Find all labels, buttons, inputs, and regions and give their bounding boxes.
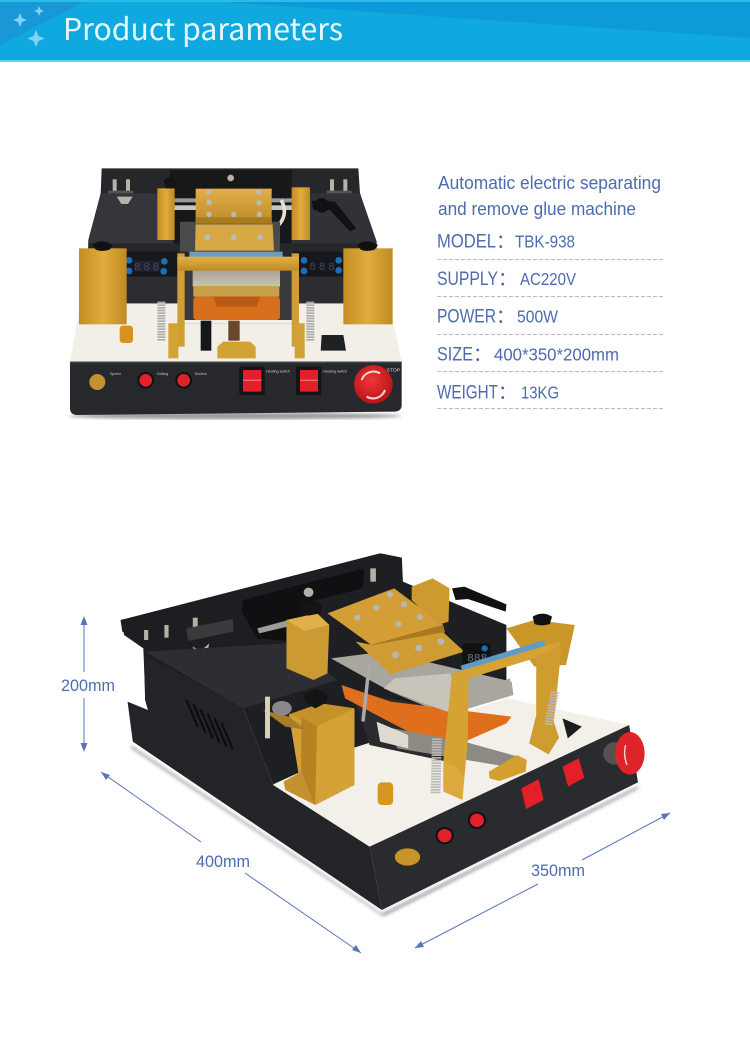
base knob bbox=[378, 782, 393, 805]
spec: model: ： bbox=[496, 226, 515, 254]
spec: power: POWER bbox=[437, 306, 496, 328]
knob and small black pad bbox=[120, 326, 346, 351]
dimension: height 200mm bbox=[61, 616, 115, 752]
front control panel bbox=[370, 725, 645, 910]
dimension: width 350mm: 350mm bbox=[531, 861, 585, 880]
front control panel: Speed bbox=[110, 372, 121, 376]
front control panel bbox=[70, 362, 402, 415]
panel captions: Cutting bbox=[157, 372, 168, 376]
side vents bbox=[186, 700, 233, 749]
red push buttons bbox=[137, 372, 154, 389]
upper gold blocks bbox=[157, 177, 310, 240]
dimension: depth 400mm bbox=[101, 772, 361, 953]
front control panel: Heating switch bbox=[266, 369, 290, 373]
spec: model: TBK-938 bbox=[515, 232, 575, 252]
springs bbox=[436, 692, 555, 793]
speed knob bbox=[89, 374, 105, 390]
spec: size: SIZE bbox=[437, 344, 473, 366]
spec: weight bbox=[437, 378, 559, 404]
centre gold plate bbox=[327, 578, 464, 674]
front left gold block bbox=[263, 689, 355, 805]
spec: supply: SUPPLY bbox=[437, 268, 498, 290]
handle bbox=[452, 587, 506, 612]
left display panel bbox=[125, 252, 180, 303]
left display panel: 888 bbox=[134, 263, 159, 275]
gold frame bbox=[168, 253, 305, 358]
side gold blocks bbox=[79, 241, 393, 324]
infographic canvas: and remove glue machine bbox=[438, 198, 636, 219]
rear right gold block bbox=[506, 620, 575, 667]
right display panel bbox=[292, 252, 345, 303]
spec: size: 400*350*200mm bbox=[494, 344, 619, 364]
worktop and orange plate bbox=[331, 652, 524, 767]
blue strip and worktop bbox=[180, 252, 293, 351]
spec: weight: ： bbox=[498, 378, 517, 404]
spec: power: ： bbox=[496, 302, 515, 328]
display bbox=[463, 643, 491, 663]
centre gold top plate bbox=[195, 189, 274, 251]
product photo: angled view of machine bbox=[121, 553, 645, 917]
icon: sparkles bbox=[13, 6, 44, 47]
rods and handle bbox=[173, 198, 356, 233]
spec: supply: ： bbox=[498, 264, 517, 291]
title: Product parameters bbox=[63, 5, 343, 49]
spec: size: ： bbox=[473, 340, 492, 366]
solid dark backing bbox=[122, 553, 506, 785]
ground shadow bbox=[131, 745, 640, 917]
emergency stop bbox=[615, 732, 645, 775]
header banner bbox=[0, 0, 750, 62]
dimension: depth 400mm: 400mm bbox=[196, 852, 250, 871]
spec: supply bbox=[437, 264, 576, 291]
machine rear panel bbox=[87, 168, 377, 303]
bolts on upright bbox=[144, 568, 376, 663]
spec: model bbox=[437, 226, 575, 254]
spec: model: MODEL bbox=[437, 230, 496, 252]
spec: weight: WEIGHT bbox=[437, 382, 498, 404]
grey column and base white bbox=[70, 303, 402, 362]
emergency stop bbox=[354, 365, 393, 404]
side body bbox=[128, 655, 382, 910]
dimension: width 350mm bbox=[415, 813, 670, 948]
spec: supply: AC220V bbox=[520, 269, 576, 289]
spec: size bbox=[437, 340, 619, 366]
product photo: angled view of machine: 888 bbox=[467, 654, 487, 666]
product photo: front view of machine bbox=[68, 168, 402, 419]
dimension: height 200mm: 200mm bbox=[61, 676, 115, 695]
top plate bbox=[145, 643, 338, 708]
rear left gold block bbox=[286, 600, 329, 680]
spec: power: 500W bbox=[517, 306, 558, 326]
white base bbox=[273, 698, 629, 847]
red rocker switches bbox=[239, 367, 265, 395]
front control panel: STOP bbox=[387, 368, 401, 374]
subtitle: Automatic electric separating bbox=[438, 172, 661, 193]
front control panel: Suction bbox=[195, 372, 207, 376]
springs bbox=[161, 302, 310, 342]
spec: power bbox=[437, 302, 558, 328]
front control panel: Heating switch bbox=[323, 369, 347, 373]
right display panel: 888 bbox=[309, 262, 335, 274]
gold frame with blue strip bbox=[443, 640, 563, 800]
rear upright bbox=[121, 553, 402, 652]
spec: weight: 13KG bbox=[521, 382, 559, 402]
